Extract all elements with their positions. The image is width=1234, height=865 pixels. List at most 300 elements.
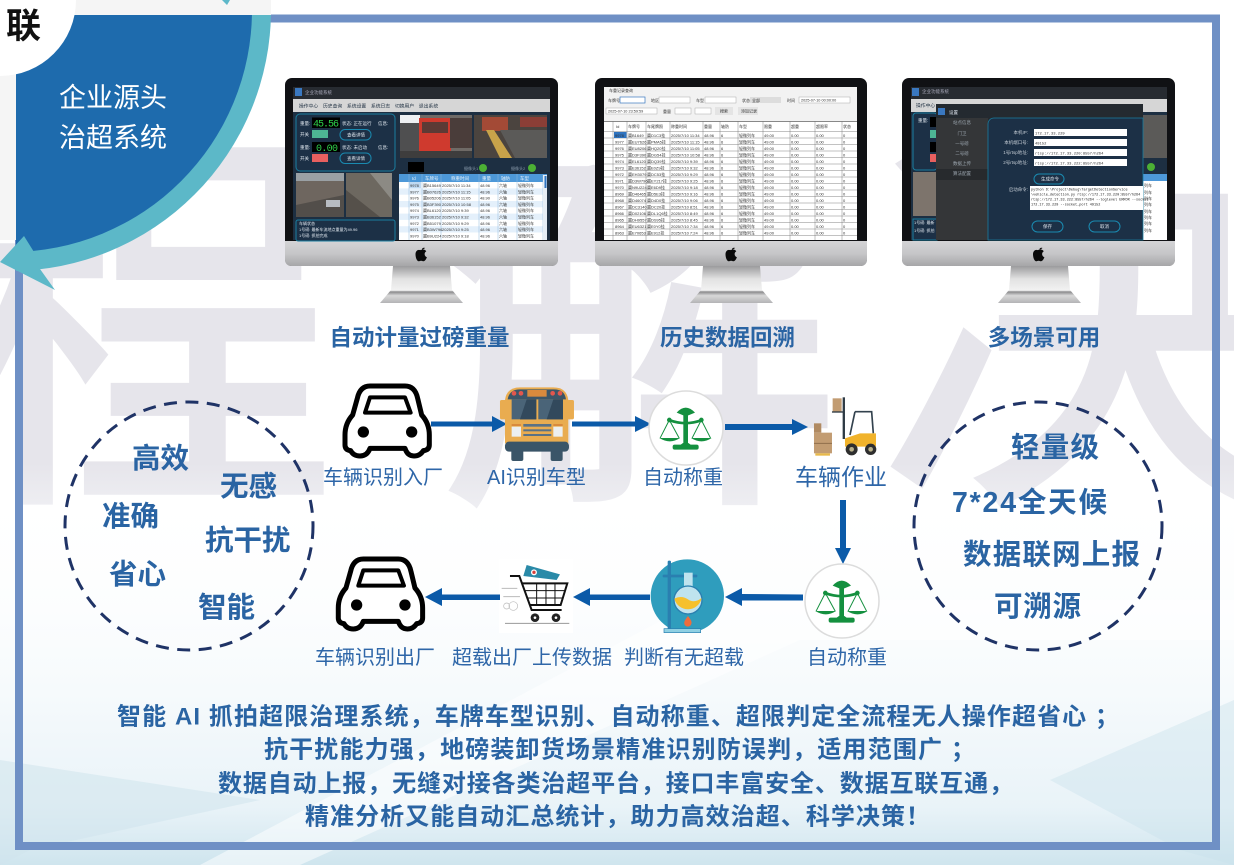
monitor 2: history records table: 冀DG54挂 <box>647 152 665 158</box>
monitor 2: history records table: 0.00 <box>816 218 825 222</box>
label: overload judgement: 判断有无超载 <box>624 646 744 669</box>
monitor 3: settings dialog: 列车 <box>1144 201 1152 207</box>
monitor 1: live weighing dashboard: 48.96 <box>480 189 491 194</box>
monitor 2: history records table: 6 <box>721 211 724 216</box>
monitor 1: live weighing dashboard: 六轴 <box>499 201 507 207</box>
monitor 3: settings dialog: 操作中心 <box>916 102 935 109</box>
monitor 2: history records table: 轻微列车 <box>739 158 755 164</box>
monitor 2: history records table: 超限率 <box>816 123 828 129</box>
monitor 1: live weighing dashboard: 冀BL6120 <box>423 207 442 213</box>
caption 3: 多场景可用 <box>988 326 1100 350</box>
monitor 2: history records table: 冀D3W796 <box>628 178 648 184</box>
monitor 2: history records table: 0 <box>843 172 846 177</box>
monitor 1: live weighing dashboard: 车辆状态 <box>299 220 315 226</box>
arrow head <box>0 236 55 290</box>
monitor 2: history records table: 轻微列车 <box>739 190 755 196</box>
monitor 1: live weighing dashboard: 2025/7/10 11:05 <box>442 196 471 201</box>
monitor 2: history records table: 48.96 <box>704 185 715 190</box>
monitor 2: history records table: 48.96 <box>704 140 715 144</box>
monitor 2: history records table: 0.00 <box>791 230 800 236</box>
monitor 3: settings dialog: 列车 <box>1144 208 1152 214</box>
monitor 2: history records table: 冀DC3140 <box>628 204 647 210</box>
monitor 2: history records table: 0 <box>843 146 846 151</box>
monitor 2: history records table: 轻微列车 <box>739 216 755 222</box>
left dashed circle: advantages <box>65 402 313 650</box>
monitor 1: live weighing dashboard: 重量 <box>482 175 491 182</box>
monitor 2: history records table: 0 <box>843 192 846 196</box>
monitor 2: history records table: 49.00 <box>764 185 775 190</box>
monitor 2: history records table: 9972 <box>615 172 625 177</box>
monitor 2: history records table: 48.96 <box>704 146 715 151</box>
monitor 2: history records table: 全部 <box>752 97 760 103</box>
monitor 2: history records table: 9975 <box>615 152 625 158</box>
monitor 2: history records table: 8968 <box>615 198 625 203</box>
monitor 1: live weighing dashboard: 48.96 <box>480 233 491 238</box>
label: auto weighing 2: 自动称重 <box>807 646 887 669</box>
monitor 2: history records table: 轴防 <box>721 123 729 129</box>
monitor 2: history records table: 添加记录 <box>741 108 757 114</box>
monitor 2: history records table: 车牌号 <box>608 97 620 103</box>
monitor 2: history records table: 冀E36152 <box>628 164 647 170</box>
monitor 2: history records table: 时间 <box>787 97 795 103</box>
monitor 2: history records table: 48.96 <box>704 166 715 170</box>
monitor 2: history records table: 0.00 <box>816 133 825 138</box>
monitor 2: history records table: 轻微列车 <box>739 145 755 151</box>
label: overload upload: 超载出厂上传数据 <box>452 646 612 669</box>
monitor 1: live weighing dashboard: 9977 <box>410 189 420 194</box>
monitor 2: history records table: 状态 <box>843 123 851 129</box>
monitor 2: history records table: 轻微列车 <box>739 223 755 229</box>
monitor 2: history records table: 2025/7/10 9:39 <box>671 159 698 164</box>
top-left corner badge <box>0 0 271 290</box>
monitor 1: live weighing dashboard: 冀B51079 <box>423 220 442 226</box>
monitor 3: settings dialog: 企业功能系统 <box>922 88 949 95</box>
monitor 2: history records table: 49.00 <box>764 230 775 236</box>
arrow: bus to scale <box>572 416 651 432</box>
monitor 2: history records table: 冀D02106 <box>628 210 647 216</box>
monitor 2: history records table: 轻微列车 <box>739 184 755 190</box>
monitor 2: history records table: 49.00 <box>764 224 775 229</box>
monitor 2: history records table: 48.96 <box>704 152 715 158</box>
monitor 1: live weighing dashboard: 0.00 <box>316 144 338 155</box>
left dashed circle: advantages: 高效 <box>132 443 189 475</box>
label: vehicle entry: 车辆识别入厂 <box>323 466 443 489</box>
monitor 2: history records table: 49.00 <box>764 218 775 222</box>
monitor 2: history records table: 车型 <box>739 123 747 129</box>
monitor 2: history records table: 冀E0Y0挂 <box>647 223 665 229</box>
monitor 2: history records table: 0.00 <box>816 178 825 184</box>
monitor 1: live weighing dashboard: 六轴 <box>499 207 507 213</box>
monitor 2: history records table: 0 <box>843 224 846 229</box>
monitor 2: history records table: 6 <box>721 140 724 144</box>
monitor 1: live weighing dashboard: 9972 <box>410 221 420 226</box>
monitor 1: live weighing dashboard: 轻微列车 <box>518 220 534 226</box>
monitor 2: history records table: 0.00 <box>816 211 825 216</box>
caption 1: 自动计量过磅重量 <box>329 326 510 350</box>
monitor 2: history records table: 9973 <box>615 166 625 170</box>
monitor 1: live weighing dashboard: 48.96 <box>480 227 491 232</box>
monitor 2: history records table: 冀EY217挂 <box>647 178 667 184</box>
monitor 2: history records table: 48.96 <box>704 230 715 236</box>
monitor 1: live weighing dashboard: 2025/7/10 9:39 <box>442 208 469 213</box>
monitor 3: settings dialog: rtsp://172.17.33.220:8557/h264 <box>1035 151 1104 156</box>
monitor 2: history records table: 2025-07-10 23:59:59 <box>608 110 643 114</box>
monitor 2: history records table: 限重 <box>764 123 772 129</box>
monitor 2: history records table: Id <box>616 124 619 129</box>
monitor 2: history records table: 9978 <box>615 133 625 138</box>
monitor 2: history records table: 49.00 <box>764 172 775 177</box>
monitor 1: live weighing dashboard: 重量: <box>300 120 310 127</box>
monitor 2: history records table: 2025/7/10 8:49 <box>671 211 698 216</box>
monitor 1: live weighing dashboard: 轻微列车 <box>518 182 534 188</box>
summary text block <box>117 704 1119 830</box>
monitor 1: live weighing dashboard: 信息: <box>378 120 388 127</box>
monitor 2: history records table: 冀DC53挂 <box>647 171 665 177</box>
monitor 2: history records table: 0 <box>843 152 846 158</box>
monitor 2: history records table: 冀DS95挂 <box>647 216 665 222</box>
monitor 3: settings dialog: 列车 <box>1144 195 1152 201</box>
monitor 3: settings dialog: 本机IP: <box>1013 129 1028 136</box>
monitor 2: history records table: 冀HQ20挂 <box>647 145 665 151</box>
monitor 2: history records table: 2025/7/10 9:32 <box>671 166 698 170</box>
monitor 3: settings dialog: 保存 <box>1043 223 1052 230</box>
summary text block: 精准分析又能自动汇总统计，助力高效治超、科学决策！ <box>305 804 930 830</box>
monitor 1: live weighing dashboard: 2025/7/10 11:15 <box>442 189 471 194</box>
monitor 2: history records table: 48.96 <box>704 159 715 164</box>
monitor 2: history records table: 49.00 <box>764 152 775 158</box>
monitor 2: history records table: 超重 <box>791 123 799 129</box>
right dashed circle: features: 轻量级 <box>1011 432 1099 464</box>
monitor 2: history records table: 0.00 <box>816 192 825 196</box>
monitor 2: history records table: 49.00 <box>764 133 775 138</box>
monitor 2: history records table: 2025/7/10 7:24 <box>671 230 698 236</box>
icon: weighing scale 2 <box>805 564 879 638</box>
monitor 1: live weighing dashboard: 9975 <box>410 202 420 207</box>
monitor 1: live weighing dashboard: 六轴 <box>499 232 507 238</box>
monitor 2: history records table: 8963 <box>615 230 625 236</box>
monitor 2: history records table: 48.96 <box>704 218 715 222</box>
monitor 3: settings dialog: 列车 <box>1144 182 1152 188</box>
monitor 1: live weighing dashboard: 2025/7/10 9:18 <box>442 233 469 238</box>
label: vehicle operation: 车辆作业 <box>795 464 887 490</box>
monitor 2: history records table: 冀DQ39挂 <box>647 158 665 164</box>
monitor 2: history records table: 6 <box>721 204 724 210</box>
monitor 1: live weighing dashboard: 2025/7/10 10:58 <box>442 202 472 207</box>
monitor 1: live weighing dashboard: 查看详情 <box>347 132 365 138</box>
monitor 2: history records table: 0.00 <box>816 204 825 210</box>
monitor 2: history records table: 0.00 <box>791 198 800 203</box>
monitor 2: history records table: 49.00 <box>764 204 775 210</box>
monitor 2: history records table: 0 <box>843 218 846 222</box>
monitor 1: live weighing dashboard: 1号磅: 抓拍完成 <box>299 232 327 238</box>
monitor 2: history records table: 49.00 <box>764 140 775 144</box>
monitor 1: live weighing dashboard: 摄像头1 <box>464 165 479 171</box>
monitor 2: history records table: 0 <box>843 185 846 190</box>
monitor 2: history records table: 48.96 <box>704 211 715 216</box>
monitor 2: history records table: 49.00 <box>764 211 775 216</box>
monitor 2: history records table: 重量 <box>663 108 671 114</box>
monitor 2: history records table: 冀D3F390 <box>628 152 647 158</box>
right dashed circle: features: 数据联网上报 <box>963 539 1140 571</box>
monitor 2: history records table: 49.00 <box>764 166 775 170</box>
monitor 2: history records table: 0 <box>843 133 846 138</box>
monitor 2: history records table: 冀E70653 <box>628 230 647 236</box>
monitor 2: history records table: 48.96 <box>704 198 715 203</box>
monitor 3: settings dialog: 二号磅 <box>955 150 969 157</box>
monitor 2: history records table: 0.00 <box>791 152 800 158</box>
monitor 2: history records table: 冀E912挂 <box>647 230 664 236</box>
monitor 1: live weighing dashboard: 1号磅: 最新车流地点重量为49.96 <box>299 226 358 232</box>
left dashed circle: advantages: 省心 <box>109 559 166 591</box>
monitor 2: history records table: 冀EL6120 <box>628 158 647 164</box>
arrow: down to second scale <box>835 500 851 564</box>
monitor 1: live weighing dashboard: 轻微列车 <box>518 207 534 213</box>
icon: flask overload check <box>651 559 724 633</box>
watermark characters: 解 <box>440 108 840 555</box>
monitor 2: history records table: 冀EU6321 <box>628 223 647 229</box>
monitor 2: history records table: 0.00 <box>791 211 800 216</box>
monitor 1: live weighing dashboard: 开关 <box>300 155 309 162</box>
monitor 2: history records table: 6 <box>721 198 724 203</box>
monitor 2: history records table: 2025-07-10 00:00:00 <box>801 98 836 102</box>
monitor 2: history records table: 0.00 <box>791 178 800 184</box>
monitor 2: history records table: 轻微列车 <box>739 204 755 210</box>
monitor 3: settings dialog: \vehicle_detection.py rtsp://172.17.33.220:8557/h264 <box>1031 192 1140 198</box>
monitor 2: history records table: 轻微列车 <box>739 132 755 138</box>
monitor 2: history records table: 车尾牌照 <box>647 123 663 129</box>
monitor 1: live weighing dashboard: 轻微列车 <box>518 232 534 238</box>
monitor 1: live weighing dashboard: 9978 <box>410 183 420 188</box>
monitor 1: live weighing dashboard: 重量: <box>300 144 310 151</box>
monitor 1: live weighing dashboard: 查看详情 <box>347 155 365 162</box>
monitor 2: history records table: 0.00 <box>816 230 825 236</box>
monitor 1: live weighing dashboard: 冀B05206 <box>423 195 442 201</box>
monitor 2: history records table: 6 <box>721 172 724 177</box>
monitor 1: live weighing dashboard: 48.96 <box>480 221 491 226</box>
monitor 3: settings dialog: rtsp://172.17.33.222:8557/h264 --loglevel ERROR --socket <box>1031 198 1149 202</box>
monitor 2: history records table: 0.00 <box>816 159 825 164</box>
monitor 2: history records table: 冀D5E3挂 <box>647 190 665 196</box>
monitor 2: history records table: 8964 <box>615 224 625 229</box>
monitor 2: history records table: 冀DC20挂 <box>647 204 665 210</box>
monitor 2: history records table: 冀D46074 <box>628 197 647 203</box>
monitor 2: history records table: 0.00 <box>791 172 800 177</box>
monitor 3: settings dialog: 本机端口号: <box>1004 139 1028 146</box>
arrow: car to bus <box>431 416 507 432</box>
monitor 2: history records table: 0.00 <box>791 159 800 164</box>
left dashed circle: advantages: 抗干扰 <box>205 525 291 557</box>
monitor 2: history records table: 冀EU8206 <box>628 145 647 151</box>
monitor 2: history records table: 6 <box>721 218 724 222</box>
monitor 2: history records table: 轻微列车 <box>739 164 755 170</box>
badge title: 企业源头 <box>59 83 167 113</box>
monitor 1: live weighing dashboard: 2025/7/10 11:34 <box>442 183 471 188</box>
monitor 1: live weighing dashboard: 车型 <box>520 175 529 182</box>
monitor 2: history records table: 0 <box>843 159 846 164</box>
monitor 1: live weighing dashboard: 摄像头2 <box>511 165 526 171</box>
monitor 3: settings dialog: 列车 <box>1144 214 1152 220</box>
monitor 1: live weighing dashboard: 轻微列车 <box>518 195 534 201</box>
monitor 2: history records table: 冀EU7626 <box>628 138 647 144</box>
arrow: scale to forklift <box>725 419 808 435</box>
right dashed circle: features: 可溯源 <box>994 591 1081 623</box>
monitor 3: settings dialog: 启动命令: <box>1009 186 1028 193</box>
monitor 2: history records table: 冀E0Z9挂 <box>647 164 665 170</box>
monitor 2: history records table: 0.00 <box>816 172 825 177</box>
arrow: scale to flask <box>725 588 803 606</box>
monitor 2: history records table: 0.00 <box>791 218 800 222</box>
monitor 1: live weighing dashboard: 冀B3W796 <box>423 226 443 232</box>
left dashed circle: advantages: 智能 <box>198 592 255 624</box>
monitor 2: history records table: 0 <box>843 140 846 144</box>
monitor 2: history records table: 车重记录查询 <box>609 87 633 93</box>
blue quarter disc <box>16 15 252 251</box>
summary text block: 数据自动上报，无缝对接各类治超平台，接口丰富安全、数据互联互通， <box>218 770 1013 798</box>
monitor 3: settings dialog: 重量: <box>918 117 928 124</box>
monitor 2: history records table: 8967 <box>615 204 625 210</box>
monitor 2: history records table: 0.00 <box>791 140 800 144</box>
monitor 2: history records table: 0 <box>843 230 846 236</box>
monitor 2: history records table: 称重时间 <box>671 123 687 129</box>
monitor 2: history records table: 0.00 <box>791 146 800 151</box>
monitor 2: history records table: 0 <box>843 198 846 203</box>
monitor 1: live weighing dashboard: 9970 <box>410 233 420 238</box>
icon: car entering <box>345 386 429 456</box>
icon: weighing scale <box>649 391 723 465</box>
monitor 1: live weighing dashboard: 六轴 <box>499 188 507 194</box>
monitor 1: live weighing dashboard: 六轴 <box>499 182 507 188</box>
monitor 3: settings dialog: 1号rtsp地址: <box>1003 149 1028 156</box>
icon: bus <box>500 387 574 461</box>
monitor 1: live weighing dashboard: 9973 <box>410 214 420 220</box>
monitor 1: live weighing dashboard: 冀B3F390 <box>423 201 442 207</box>
monitor 2: history records table: 2025/7/10 9:25 <box>671 178 698 184</box>
monitor 3: settings dialog: 172.17.33.229 <box>1035 132 1065 136</box>
label: auto weighing: 自动称重 <box>643 466 723 489</box>
arrow: cart to car <box>425 588 500 606</box>
monitor 3: settings dialog: 算法配置 <box>953 170 971 177</box>
monitor 1: live weighing dashboard: 45.56 <box>313 120 339 130</box>
monitor 2: history records table: 8969 <box>615 192 625 196</box>
monitor 2: history records table: 2025/7/10 11:05 <box>671 146 700 151</box>
icon: shopping cart <box>499 559 573 633</box>
monitor 1: live weighing dashboard: 2025/7/10 9:29 <box>442 221 469 226</box>
monitor 3: settings dialog: 取消 <box>1100 223 1109 230</box>
monitor 2: history records table: 0.00 <box>791 166 800 170</box>
monitor 2: history records table: 冀D1C3挂 <box>647 132 665 138</box>
monitor 2: history records table: 48.96 <box>704 224 715 229</box>
summary text block: 智能 AI 抓拍超限治理系统，车牌车型识别、自动称重、超限判定全流程无人操作超省心 ； <box>117 704 1119 730</box>
monitor 2: history records table: 48.96 <box>704 192 715 196</box>
monitor 1: live weighing dashboard: 冀B36152 <box>423 214 442 220</box>
monitor 2: history records table: 2025/7/10 9:29 <box>671 172 698 177</box>
caption 2: 历史数据回溯 <box>660 326 795 350</box>
monitor 3: settings dialog: 数据上传 <box>953 160 971 167</box>
monitor 1: live weighing dashboard: 状态: 未启动 <box>342 144 368 151</box>
monitor 1: live weighing dashboard: 2025/7/10 9:25 <box>442 227 469 232</box>
monitor 2: history records table: 49.00 <box>764 192 775 196</box>
monitor 3: settings dialog: 1号磅: 最新 <box>914 219 934 225</box>
monitor 1: live weighing dashboard: 轻微列车 <box>518 188 534 194</box>
monitor 2: history records table: 地区 <box>651 97 659 103</box>
right dashed circle: features <box>914 402 1162 650</box>
monitor 1: live weighing dashboard: 开关 <box>300 131 309 138</box>
monitor 2: history records table: 0.00 <box>816 140 825 144</box>
monitor 2: history records table: 0.00 <box>816 166 825 170</box>
monitor 2: history records table: 冀N9U224 <box>628 184 647 190</box>
monitor 1: live weighing dashboard: 六轴 <box>499 220 507 226</box>
monitor 3: settings dialog: 172.17.33.229 --socket_port 49152 <box>1031 202 1100 208</box>
monitor 3: settings dialog: 2号rtsp地址: <box>1003 159 1028 166</box>
monitor 2: history records table: 0.00 <box>816 198 825 203</box>
icon: forklift and boxes <box>814 397 876 456</box>
monitor 2: history records table: 2025/7/10 8:45 <box>671 218 698 222</box>
monitor 1: live weighing dashboard: 冀B9U224 <box>423 232 442 238</box>
monitor 2: history records table: 9976 <box>615 146 625 151</box>
monitor 3: settings dialog: 列车 <box>1144 220 1152 226</box>
right dashed circle: features: 7*24全天候 <box>952 487 1107 519</box>
monitor 1: live weighing dashboard: 六轴 <box>499 214 507 220</box>
monitor 2: history records table: 49.00 <box>764 146 775 151</box>
monitor 2: history records table: 冀E6D9挂 <box>647 184 665 190</box>
summary text block: 抗干扰能力强，地磅装卸货场景精准识别防误判，适用范围广 ； <box>264 736 975 764</box>
monitor 1: live weighing dashboard: 轴防 <box>501 175 510 182</box>
monitor 1: live weighing dashboard: 48.96 <box>480 208 491 213</box>
monitor 2: history records table: 48.96 <box>704 133 715 138</box>
monitor 2: history records table: 0 <box>843 178 846 184</box>
monitor 2: history records table: 9977 <box>615 140 625 144</box>
monitor 2: history records table: 轻微列车 <box>739 210 755 216</box>
monitor 2: history records table: 49.00 <box>764 198 775 203</box>
monitor 2: history records table: 0.00 <box>816 185 825 190</box>
monitor 2: history records table: 48.96 <box>704 172 715 177</box>
monitor 2: history records table: 轻微列车 <box>739 230 755 236</box>
monitor 1: live weighing dashboard: 车牌号 <box>425 175 439 182</box>
monitor 1: live weighing dashboard: 六轴 <box>499 226 507 232</box>
monitor 2: history records table: 2025/7/10 7:34 <box>671 224 698 229</box>
monitor 1: live weighing dashboard: 48.96 <box>480 214 491 220</box>
monitor 2: history records table: 2025/7/10 9:18 <box>671 185 698 190</box>
monitor 3: settings dialog: 1号磅: 抓拍 <box>914 227 934 233</box>
monitor 2: history records table: 0.00 <box>816 146 825 151</box>
monitor 2: history records table: 轻微列车 <box>739 171 755 177</box>
monitor 2: history records table: 8965 <box>615 218 625 222</box>
arrow: flask to cart <box>573 588 650 606</box>
monitor 2: history records table: 轻微列车 <box>739 178 755 184</box>
monitor 2: history records table: 2025/7/10 9:16 <box>671 192 698 196</box>
monitor 1: live weighing dashboard: 操作中心 历史查询 系统设置 系统日志 切换用户 退出系统 <box>299 102 438 110</box>
badge title line 2: 治超系统 <box>59 123 167 153</box>
monitor 1: live weighing dashboard: 六轴 <box>499 195 507 201</box>
monitor 1: live weighing dashboard <box>285 78 558 303</box>
monitor 2: history records table: 搜索 <box>720 108 728 114</box>
monitor 3: settings dialog <box>902 78 1175 303</box>
left dashed circle: advantages: 无感 <box>220 471 277 503</box>
monitor 1: live weighing dashboard: 48.96 <box>480 202 491 207</box>
monitor 2: history records table: 6 <box>721 152 724 158</box>
monitor 2: history records table: 状态 <box>742 97 750 103</box>
monitor 2: history records table: 0 <box>843 211 846 216</box>
monitor 2: history records table: 轻微列车 <box>739 197 755 203</box>
monitor 2: history records table: 6 <box>721 192 724 196</box>
monitor 2: history records table: 48.96 <box>704 178 715 184</box>
monitor 1: live weighing dashboard: 2025/7/10 9:32 <box>442 214 469 220</box>
monitor 2: history records table: 轻微列车 <box>739 152 755 158</box>
monitor 1: live weighing dashboard: 9976 <box>410 196 420 201</box>
monitor 3: settings dialog: rtsp://172.17.33.222:8557/h264 <box>1035 161 1104 166</box>
monitor 2: history records table: 6 <box>721 230 724 236</box>
monitor 2: history records table: 6 <box>721 146 724 151</box>
